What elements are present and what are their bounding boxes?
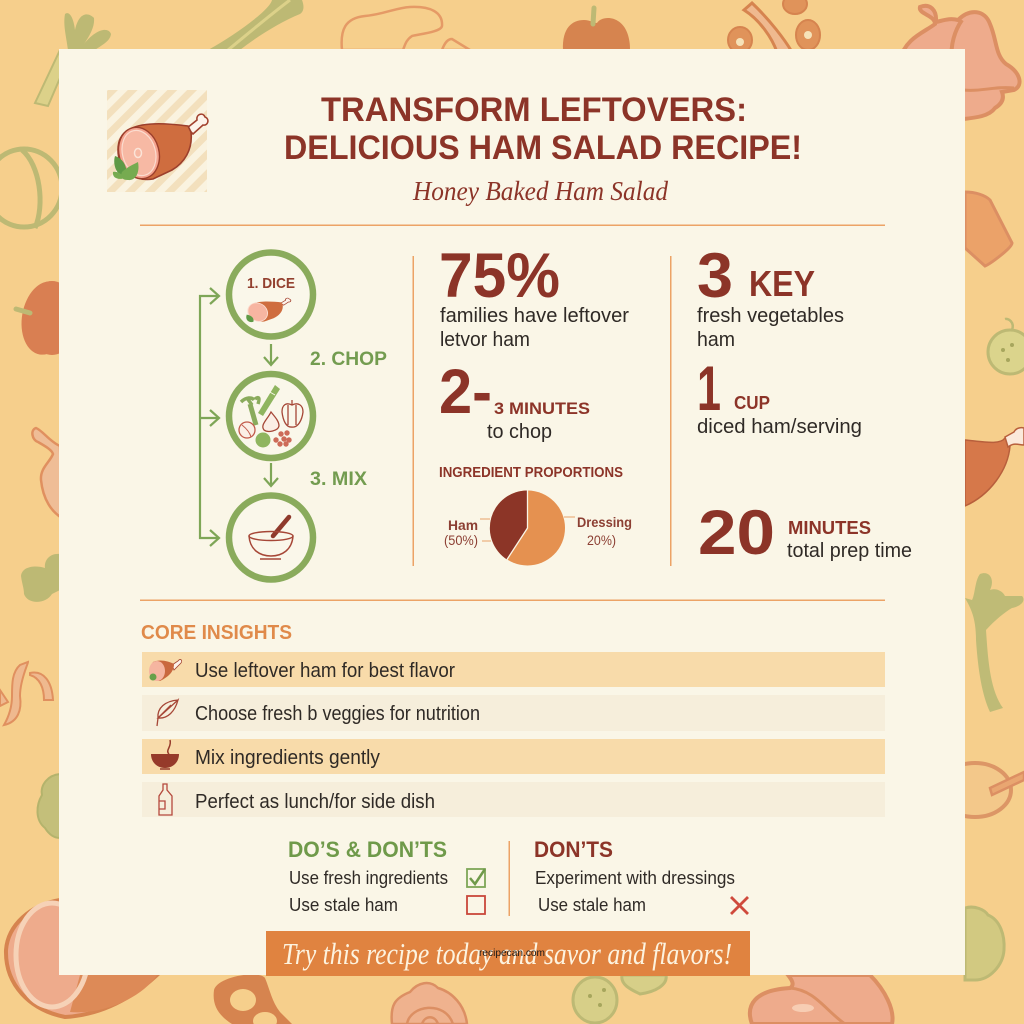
leaf left — [21, 554, 60, 602]
stat: 20 minutes: 20 — [698, 498, 775, 568]
green round right — [988, 319, 1024, 374]
step circle: dice — [229, 252, 313, 336]
step circle: dice: 1. DICE — [247, 275, 295, 292]
stat: 1 cup: 1 — [697, 354, 721, 424]
pink pear ham top right — [900, 6, 1020, 120]
pie chart — [444, 490, 632, 566]
stat: 1 cup — [697, 354, 862, 438]
pie chart: 20%) — [587, 533, 616, 548]
insight row: bowl: Mix ingredients gently — [195, 747, 380, 769]
stat: 3 key: ham — [697, 329, 735, 351]
ham slice bottom left — [6, 900, 157, 1017]
stat: 1 cup: diced ham/serving — [697, 416, 862, 438]
pie chart: Ham — [448, 518, 478, 533]
don'ts column — [534, 837, 748, 915]
stat: 75%: 75% — [439, 241, 560, 311]
watermark: recipecan.com — [479, 947, 545, 959]
stats column 2 — [697, 241, 912, 568]
stat: 2-3 minutes: to chop — [487, 421, 552, 443]
stat: 3 key: 3 — [697, 241, 733, 311]
insight row: bowl — [142, 739, 885, 774]
stat: 2-3 minutes — [439, 357, 590, 443]
cucumber slices bottom — [573, 975, 666, 1023]
insight row: leaf — [142, 695, 885, 731]
arrow down 1 — [264, 344, 278, 365]
celery right — [965, 573, 1024, 712]
arrow down 2 — [264, 463, 278, 486]
stat: 2-3 minutes: 2- — [439, 357, 492, 427]
green blob left — [37, 774, 60, 838]
subtitle: Honey Baked Ham Salad — [412, 176, 668, 206]
heading: CORE INSIGHTS — [141, 622, 292, 644]
bowl right — [939, 763, 1024, 817]
strips left — [0, 662, 53, 725]
call to action banner: Try this recipe today and savor and flavors! — [282, 936, 732, 971]
stat: 20 minutes: MINUTES — [788, 518, 871, 538]
stat: 75% — [439, 241, 629, 351]
insight row: bottle: Perfect as lunch/for side dish — [195, 791, 435, 813]
rings top — [728, 0, 820, 53]
ham outline top — [342, 7, 470, 50]
don'ts column: DON’TS — [534, 837, 613, 862]
call to action banner — [266, 931, 750, 976]
stat: 3 key: fresh vegetables — [697, 305, 844, 327]
icon: ham on striped tile — [107, 90, 208, 192]
stat: 3 key: KEY — [749, 263, 815, 304]
insight row: ham — [142, 652, 885, 687]
header — [107, 90, 802, 206]
core insights — [141, 622, 885, 817]
pie chart heading: INGREDIENT PROPORTIONS — [439, 465, 623, 481]
label: mix: 3. MIX — [310, 468, 367, 490]
title: TRANSFORM LEFTOVERS: — [321, 91, 747, 129]
green blob right — [965, 907, 1004, 980]
don'ts column: Use stale ham — [538, 895, 646, 915]
stat: 2-3 minutes: 3 MINUTES — [494, 399, 590, 418]
title — [284, 91, 802, 167]
ring shapes bottom — [214, 974, 292, 1024]
celery top left — [35, 0, 303, 106]
do's column — [288, 837, 485, 915]
stats column 1 — [439, 241, 632, 566]
stat: 20 minutes — [698, 498, 912, 568]
label: chop: 2. CHOP — [310, 348, 387, 370]
process flow — [200, 252, 387, 580]
insight row: ham: Use leftover ham for best flavor — [195, 660, 455, 682]
flower ham bottom — [392, 983, 467, 1024]
do's column: Use fresh ingredients — [289, 868, 448, 888]
ham leg right — [965, 428, 1024, 506]
orange block right — [965, 192, 1012, 266]
step circle: chop — [229, 374, 313, 458]
step circle: mix — [229, 496, 313, 580]
title: DELICIOUS HAM SALAD RECIPE! — [284, 129, 802, 167]
insight row: leaf: Choose fresh b veggies for nutrition — [195, 703, 480, 725]
pie chart: Dressing — [577, 515, 632, 530]
feedback arrows — [200, 288, 219, 546]
do's column: DO’S & DON’TS — [288, 837, 447, 862]
apple left — [16, 277, 78, 359]
stat: 3 key — [697, 241, 844, 351]
stat: 20 minutes: total prep time — [787, 540, 912, 562]
ham slice bottom right — [750, 975, 893, 1024]
apple top — [563, 8, 630, 50]
don'ts column: Experiment with dressings — [535, 868, 735, 888]
pie chart: (50%) — [444, 533, 478, 548]
stat: 75%: families have leftover — [440, 305, 629, 327]
insight row: bottle — [142, 782, 885, 817]
do's column: Use stale ham — [289, 895, 398, 915]
green outline left — [0, 149, 62, 228]
do's and don'ts — [288, 837, 748, 916]
ham shape left — [32, 428, 62, 518]
stat: 1 cup: CUP — [734, 393, 770, 413]
stat: 75%: letvor ham — [440, 329, 530, 351]
